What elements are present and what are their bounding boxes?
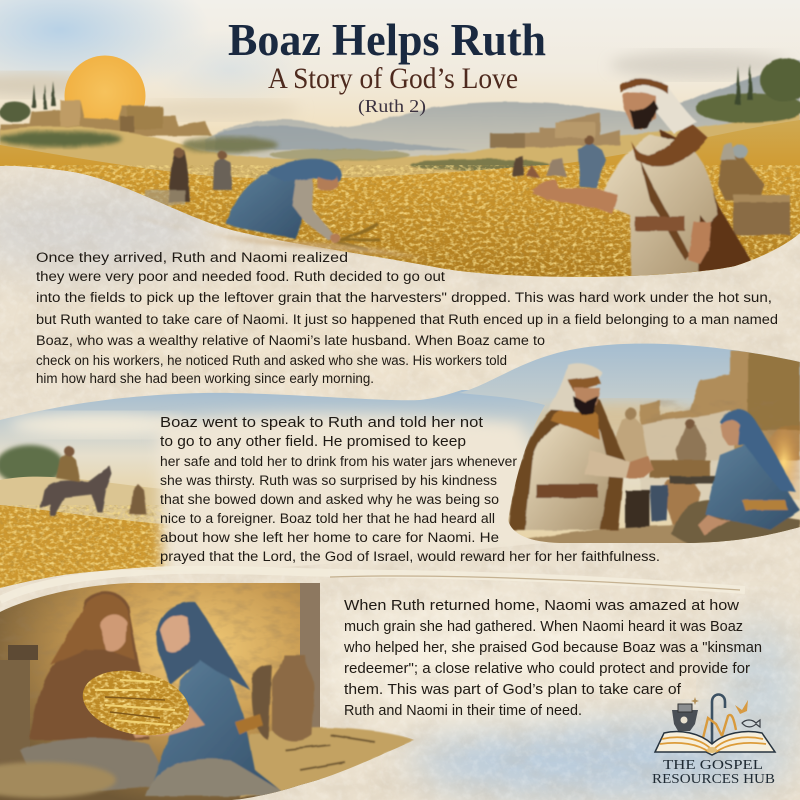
text block: Ruth gleans in the field: into the fields to pick up the leftover grain that the harvesters" dropped. This was hard work under the hot sun, xyxy=(36,290,772,305)
logo wordmark: RESOURCES HUB xyxy=(652,772,775,787)
grain sack xyxy=(0,762,116,798)
text block: Naomi praises God: much grain she had gathered. When Naomi heard it was Boaz xyxy=(344,618,743,635)
stone walls and ruins xyxy=(640,350,800,500)
icon: fish xyxy=(742,720,760,727)
figure: Ruth seated xyxy=(672,409,800,545)
icon: open book xyxy=(655,731,775,755)
logo: The Gospel Resources Hub xyxy=(652,694,775,787)
town on the left hill xyxy=(0,81,212,136)
text block: Ruth gleans in the field: Once they arrived, Ruth and Naomi realized xyxy=(36,250,348,265)
icon: ark xyxy=(672,704,698,731)
text block: Boaz shows kindness: to go to any other field. He promised to keep xyxy=(160,433,466,450)
icon: golden arches xyxy=(702,715,736,742)
sun xyxy=(64,56,146,121)
text block: Boaz shows kindness: nice to a foreigner. Boaz told her that he had heard all xyxy=(160,511,495,526)
text block: Boaz shows kindness: she was thirsty. Ruth was so surprised by his kindness xyxy=(160,473,497,488)
text block: Ruth gleans in the field xyxy=(36,250,778,386)
text block: Ruth gleans in the field: him how hard she had been working since early morning. xyxy=(36,371,374,386)
logo wordmark xyxy=(652,758,775,787)
panel: Ruth and Naomi at home scene xyxy=(0,580,415,800)
scripture reference: (Ruth 2) xyxy=(358,96,426,117)
text block: Naomi praises God xyxy=(343,597,762,719)
water jars xyxy=(625,476,718,530)
distant mountains xyxy=(205,60,800,170)
text block: Ruth gleans in the field: check on his workers, he noticed Ruth and asked who she was. His workers told xyxy=(36,353,507,368)
text block: Ruth gleans in the field: but Ruth wanted to take care of Naomi. It just so happened that Ruth enced up in a field belonging to a man named xyxy=(36,312,778,327)
text block: Naomi praises God: who helped her, she praised God because Boaz was a "kinsman xyxy=(343,639,762,656)
text block: Naomi praises God: redeemer"; a close relative who could protect and provide for xyxy=(344,660,750,677)
rider on donkey xyxy=(40,446,147,516)
golden hills and field xyxy=(0,58,800,290)
text block: Boaz shows kindness: that she bowed down and asked why he was being so xyxy=(160,492,499,507)
background workers at table xyxy=(610,408,710,478)
text block: Naomi praises God: Ruth and Naomi in their time of need. xyxy=(344,702,582,719)
stone interior wall xyxy=(0,580,320,800)
icon: star sparkle xyxy=(691,697,699,705)
logo wordmark: THE GOSPEL xyxy=(663,758,763,773)
icon: shepherd crook xyxy=(712,694,725,747)
left sky and field xyxy=(0,390,545,588)
figure: Ruth gleaning xyxy=(226,159,380,250)
text block: Boaz shows kindness xyxy=(160,414,660,564)
floor stones xyxy=(240,728,415,798)
paper fade behind text xyxy=(158,415,560,585)
text block: Naomi praises God: When Ruth returned home, Naomi was amazed at how xyxy=(344,597,739,614)
figure: Naomi xyxy=(20,592,170,795)
panel: Boaz and Ruth conversation xyxy=(460,344,800,543)
wheat field xyxy=(0,120,800,290)
parchment wave edge under the harvest scene xyxy=(130,215,430,260)
subtitle: A Story of God’s Love xyxy=(268,62,518,95)
figure: Boaz talking xyxy=(508,363,654,530)
figure: Boaz xyxy=(532,74,752,285)
sky xyxy=(0,0,800,150)
title: Boaz Helps Ruth xyxy=(228,15,546,65)
distant village on the right xyxy=(490,113,620,148)
text block: Ruth gleans in the field: Boaz, who was a wealthy relative of Naomi’s late husband. When Boaz came to xyxy=(36,333,545,348)
cream ribbon above bottom panel xyxy=(0,570,745,600)
figure: Ruth xyxy=(125,602,290,796)
ground xyxy=(527,519,800,543)
text block: Naomi praises God: them. This was part of God’s plan to take care of xyxy=(344,681,682,698)
text block: Ruth gleans in the field: they were very poor and needed food. Ruth decided to go out xyxy=(36,269,445,284)
background workers xyxy=(145,135,790,235)
text block: Boaz shows kindness: prayed that the Lord, the God of Israel, would reward her for her faithfulness. xyxy=(160,549,660,564)
clay jars xyxy=(252,655,314,741)
text block: Boaz shows kindness: Boaz went to speak to Ruth and told her not xyxy=(160,414,484,431)
text block: Boaz shows kindness: about how she left her home to care for Naomi. He xyxy=(160,530,499,545)
icon: dove xyxy=(735,700,748,714)
text block: Boaz shows kindness: her safe and told her to drink from his water jars whenever xyxy=(160,454,518,469)
panel: Boaz speaks to Ruth scene xyxy=(0,390,546,588)
panel: harvest field scene xyxy=(0,0,800,290)
wheat bundle xyxy=(82,670,190,736)
